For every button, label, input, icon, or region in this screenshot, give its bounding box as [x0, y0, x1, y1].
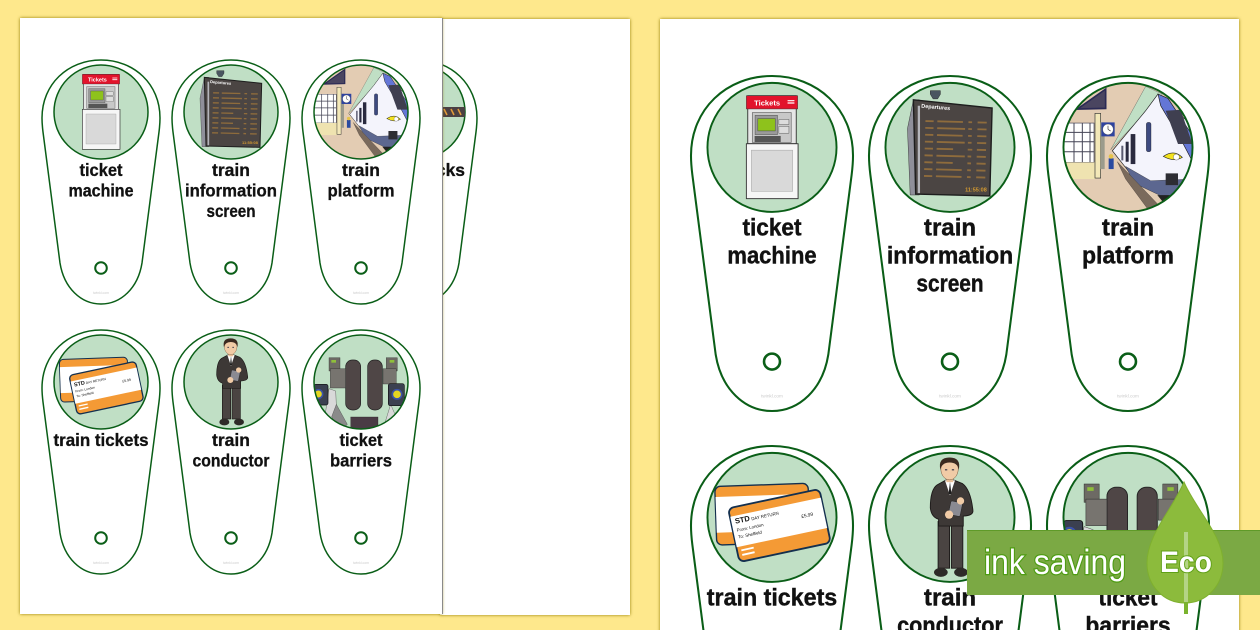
tag: ticket machine: machine [68, 180, 134, 200]
tag: train platform: platform [328, 180, 394, 200]
icon: train tickets: DAY RETURN [85, 377, 107, 385]
icon: train tickets: DAY RETURN [751, 511, 779, 521]
tag: ticket barriers: barriers [330, 450, 392, 470]
large tag: ticket barriers: ticket [1098, 584, 1158, 611]
large tag: ticket barriers [1047, 446, 1209, 630]
tag: train information screen: screen [206, 201, 256, 221]
icon: train tickets: From: London [75, 385, 95, 393]
large tag: train platform [1047, 76, 1209, 411]
large tag: train platform: platform [1082, 242, 1174, 269]
icon: departures board [907, 91, 992, 196]
icon: ticket machine [82, 74, 120, 149]
icon: train tickets: STD [74, 380, 86, 389]
large tag: train information screen: train [924, 214, 976, 241]
back sheet [438, 16, 632, 618]
icon: ticket barriers [1064, 484, 1178, 530]
tag: train conductor: train [212, 430, 250, 450]
large tag: train platform: train [1102, 214, 1154, 241]
tag: train tickets: twinkl.com [93, 561, 109, 565]
icon: train tickets [715, 483, 831, 562]
large tag: ticket machine: twinkl.com [761, 393, 783, 398]
large tag: train tickets [691, 446, 853, 630]
tag: ticket barriers: twinkl.com [353, 561, 369, 565]
large tag: train conductor: train [924, 584, 976, 611]
icon: ticket machine: Tickets [88, 78, 107, 84]
tag: train tickets: train tickets [54, 430, 149, 450]
tag: train tracks (partly hidden) [443, 64, 478, 296]
tag: train conductor [172, 330, 290, 574]
icon: train tickets [59, 357, 144, 415]
icon: conductor [217, 338, 248, 425]
tag: train platform: train [342, 160, 380, 180]
large tag: train tickets: train tickets [707, 584, 837, 611]
icon: platform and train [1064, 84, 1192, 211]
large tag: train information screen [869, 76, 1031, 411]
tag: train conductor: conductor [192, 450, 270, 470]
tag: train platform: twinkl.com [353, 291, 369, 295]
large tag: train information screen: twinkl.com [939, 393, 961, 398]
right sheet, enlarged [660, 19, 1239, 630]
large tag: ticket machine [691, 76, 853, 411]
icon: eco leaf: Eco [1160, 546, 1212, 579]
icon: departures board: 11:55:08 [965, 187, 987, 193]
tag: ticket barriers [302, 330, 420, 574]
large tag: train information screen: screen [916, 271, 984, 298]
icon: train tickets: STD [734, 514, 751, 526]
icon: train tickets: To: Sheffield [76, 391, 94, 398]
large tag: train information screen: information [887, 242, 1013, 269]
large tag: train platform: twinkl.com [1117, 393, 1139, 398]
tag: train tickets [42, 330, 160, 574]
large tag: ticket machine: machine [727, 242, 817, 269]
icon: train tickets: From: London [736, 522, 765, 533]
icon: ticket barriers [314, 358, 404, 433]
tag: ticket machine [42, 60, 160, 304]
tag: train platform [302, 60, 420, 304]
ink saving banner [967, 482, 1260, 614]
icon: train tickets: £5.99 [122, 378, 131, 384]
icon: departures board [200, 71, 262, 147]
tag: ticket barriers: ticket [340, 430, 383, 450]
large tag: train conductor [869, 446, 1031, 630]
tag: ticket machine: ticket [80, 160, 123, 180]
tag: ticket machine: twinkl.com [93, 291, 109, 295]
ink saving banner: ink saving [984, 543, 1126, 582]
front sheet [20, 18, 442, 614]
tag: train tracks (partly hidden): train tracks [371, 160, 465, 180]
icon: train tickets: £5.99 [801, 512, 814, 520]
icon: conductor [930, 457, 973, 577]
tag: train information screen: information [185, 180, 277, 200]
tag: train conductor: twinkl.com [223, 561, 239, 565]
tag: train information screen: train [212, 160, 250, 180]
tag: train information screen [172, 60, 290, 304]
icon: ticket machine: Tickets [754, 99, 780, 108]
icon: platform and train [314, 66, 408, 158]
icon: train tickets: To: Sheffield [738, 530, 763, 540]
icon: ticket machine [746, 96, 798, 199]
tag: train information screen: twinkl.com [223, 291, 239, 295]
icon: departures board: Departures [210, 79, 232, 86]
icon: eco leaf [1147, 482, 1223, 614]
icon: departures board: 11:55:08 [242, 140, 259, 145]
large tag: ticket machine: ticket [742, 214, 802, 241]
icon: departures board: Departures [921, 104, 950, 112]
